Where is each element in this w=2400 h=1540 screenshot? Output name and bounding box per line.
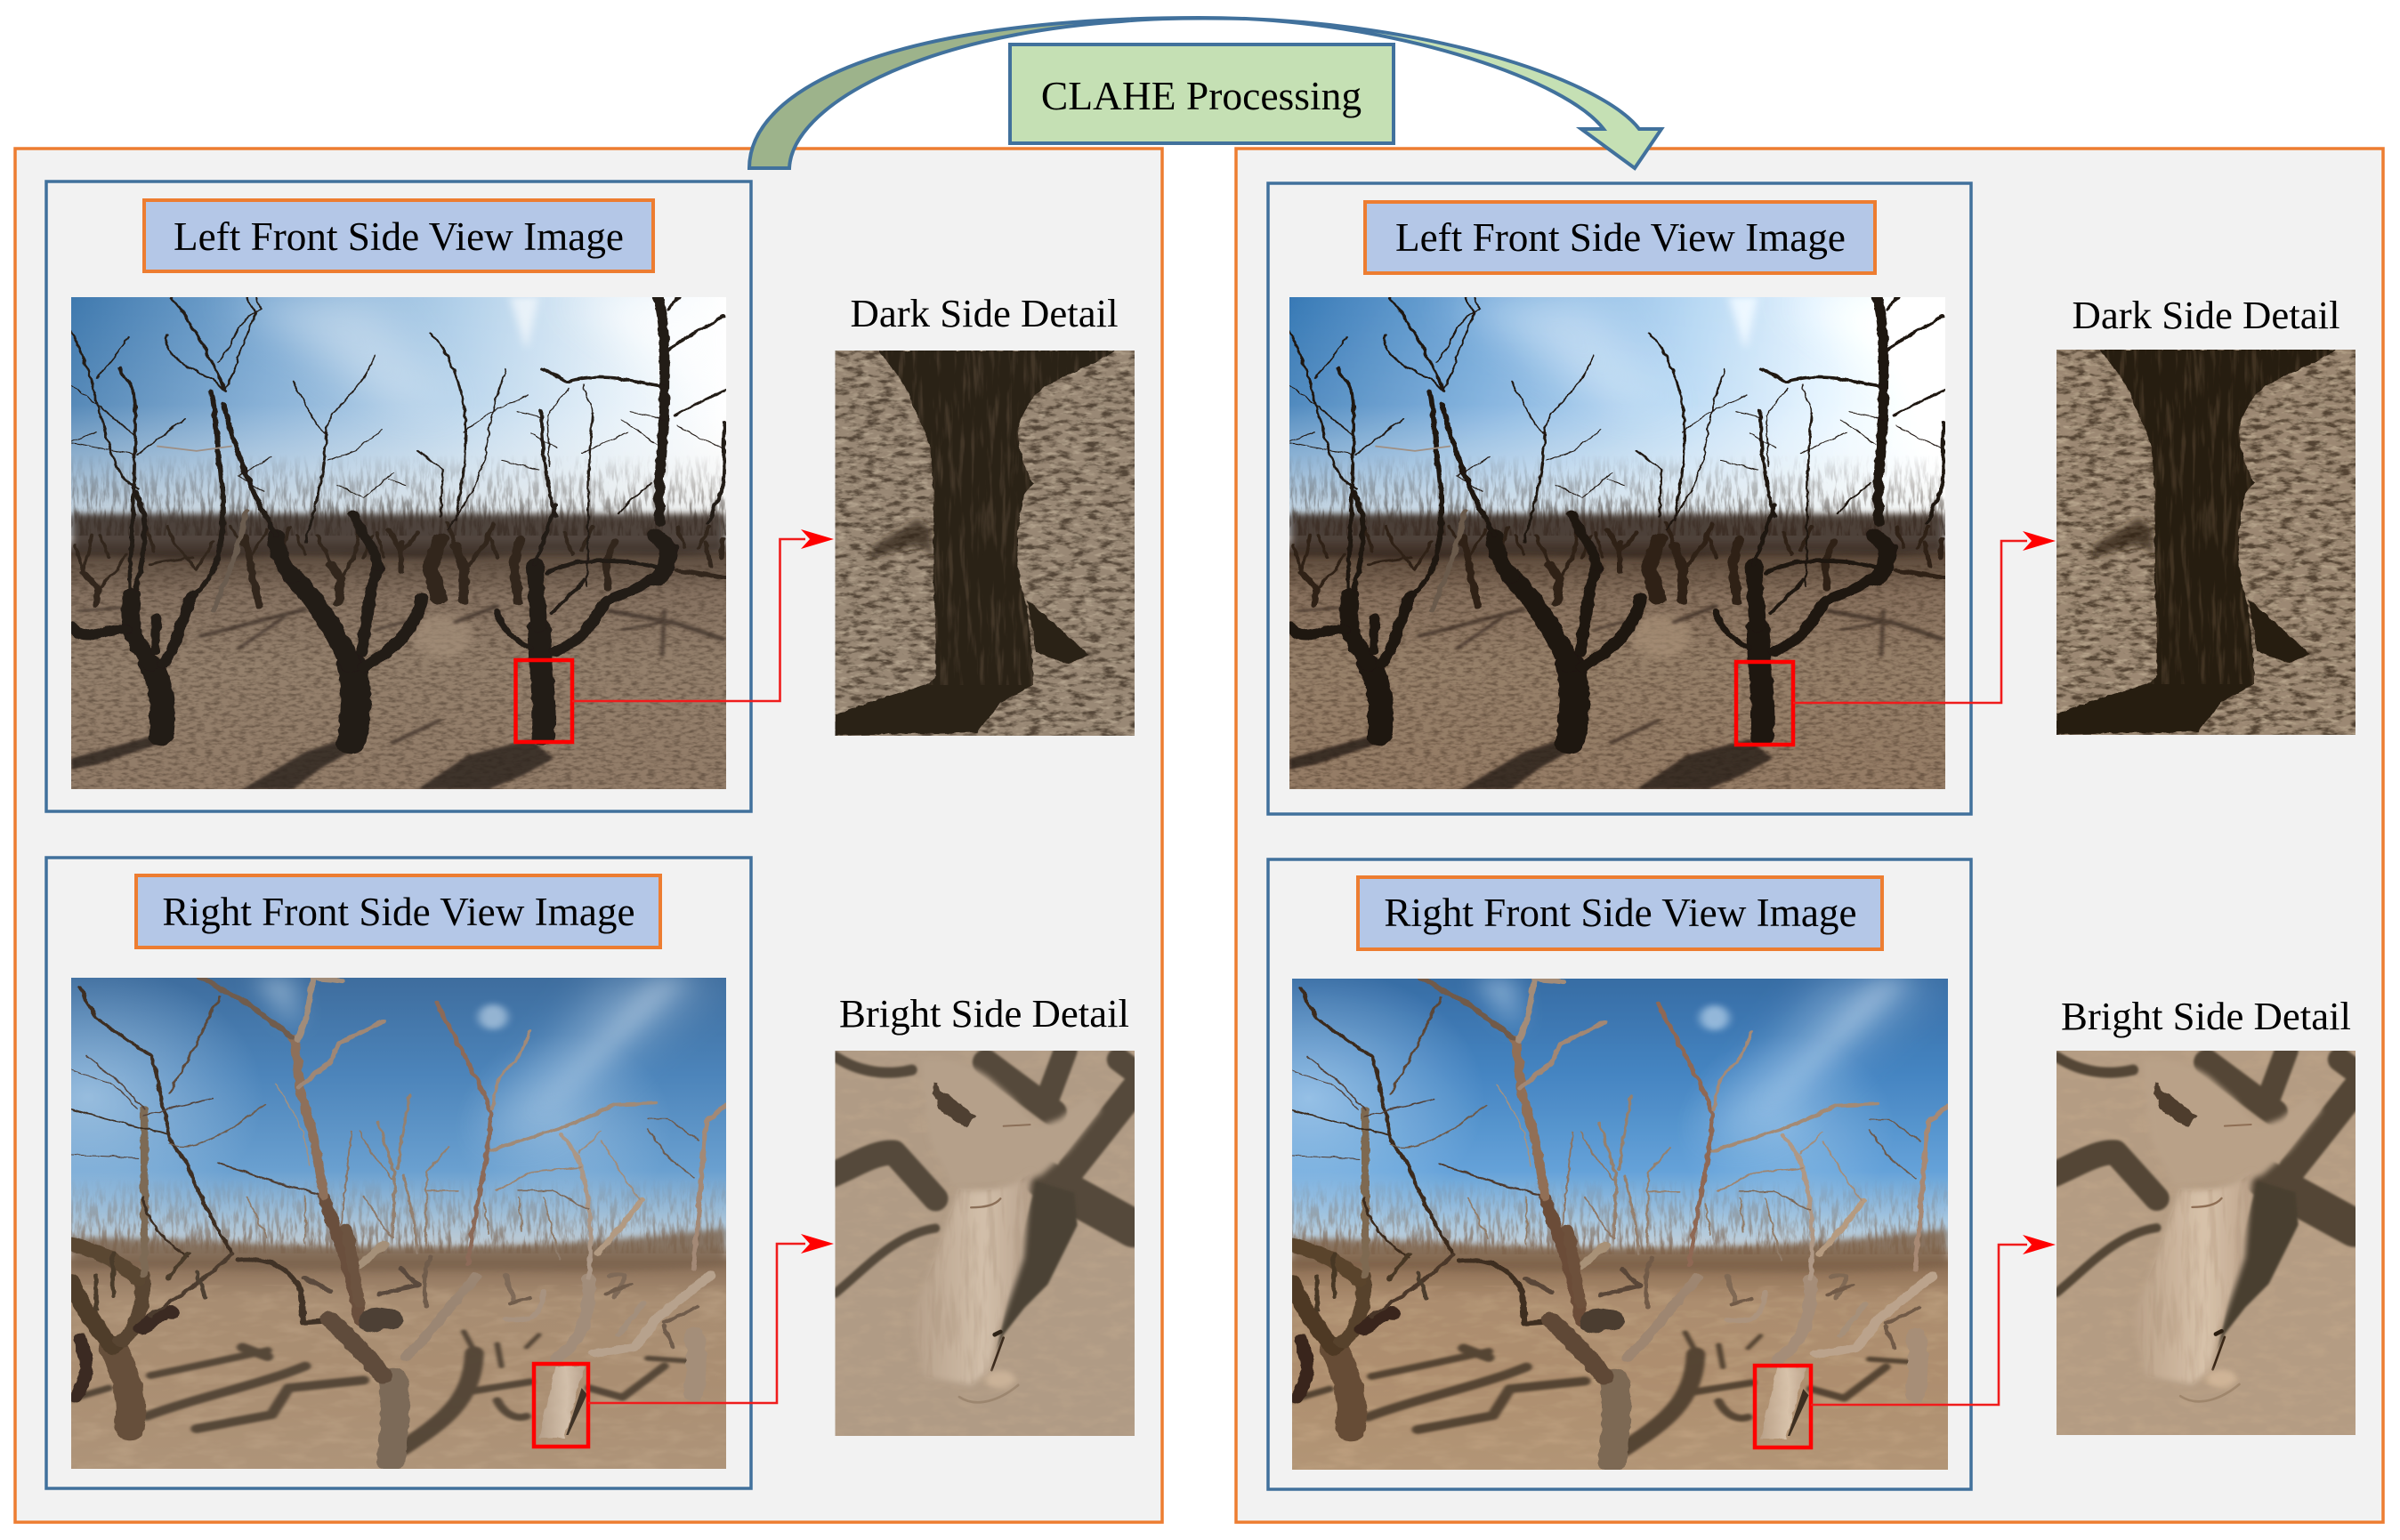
label: left front side view image: Left Front Side View Image [174, 214, 624, 259]
arrow: crop to dark side detail [572, 529, 834, 701]
highlight: dark side crop enhanced [1736, 662, 1793, 745]
highlight: bright side crop enhanced [1755, 1366, 1811, 1447]
box: right front side view enhanced [1133, 859, 1971, 1489]
photo: dark side detail enhanced [2057, 350, 2356, 735]
caption: dark side detail: Dark Side Detail [850, 291, 1119, 335]
highlight: dark side crop [516, 660, 572, 742]
label: left front side view image enhanced: Left Front Side View Image [1395, 215, 1846, 260]
arrow: crop to enhanced dark side detail [1793, 531, 2056, 703]
label: right front side view image [136, 875, 660, 947]
label: left front side view image enhanced [1365, 202, 1875, 273]
label: CLAHE processing [1010, 44, 1394, 143]
caption: dark side detail enhanced: Dark Side Detail [2072, 293, 2340, 337]
photo: bright side detail [832, 1051, 1135, 1436]
label: right front side view image enhanced [1358, 877, 1882, 949]
box: left front side view [46, 181, 751, 811]
caption: bright side detail enhanced: Bright Side Detail [2061, 994, 2351, 1038]
photo: left front side view [71, 297, 726, 789]
label: right front side view image: Right Front Side View Image [162, 890, 635, 934]
photo: right front side view enhanced [1133, 966, 1948, 1470]
panel: CLAHE enhanced images [1133, 149, 2383, 1522]
label: right front side view image enhanced: Right Front Side View Image [1384, 891, 1857, 935]
photo: bright side detail enhanced [2054, 1051, 2356, 1435]
photo: left front side view enhanced [1289, 297, 1945, 789]
panel: original images [0, 149, 1162, 1522]
box: left front side view enhanced [1268, 183, 1971, 814]
photo: dark side detail [835, 351, 1135, 736]
label: CLAHE processing: CLAHE Processing [1041, 73, 1362, 118]
label: left front side view image [144, 200, 653, 271]
arrow: curved process arrow [749, 18, 1661, 168]
box: right front side view [0, 858, 751, 1488]
arrow: crop to enhanced bright side detail [1811, 1235, 2056, 1405]
arrow: crop to bright side detail [588, 1234, 834, 1403]
highlight: bright side crop [534, 1364, 588, 1447]
caption: bright side detail: Bright Side Detail [839, 991, 1129, 1036]
photo: right front side view [0, 965, 726, 1469]
